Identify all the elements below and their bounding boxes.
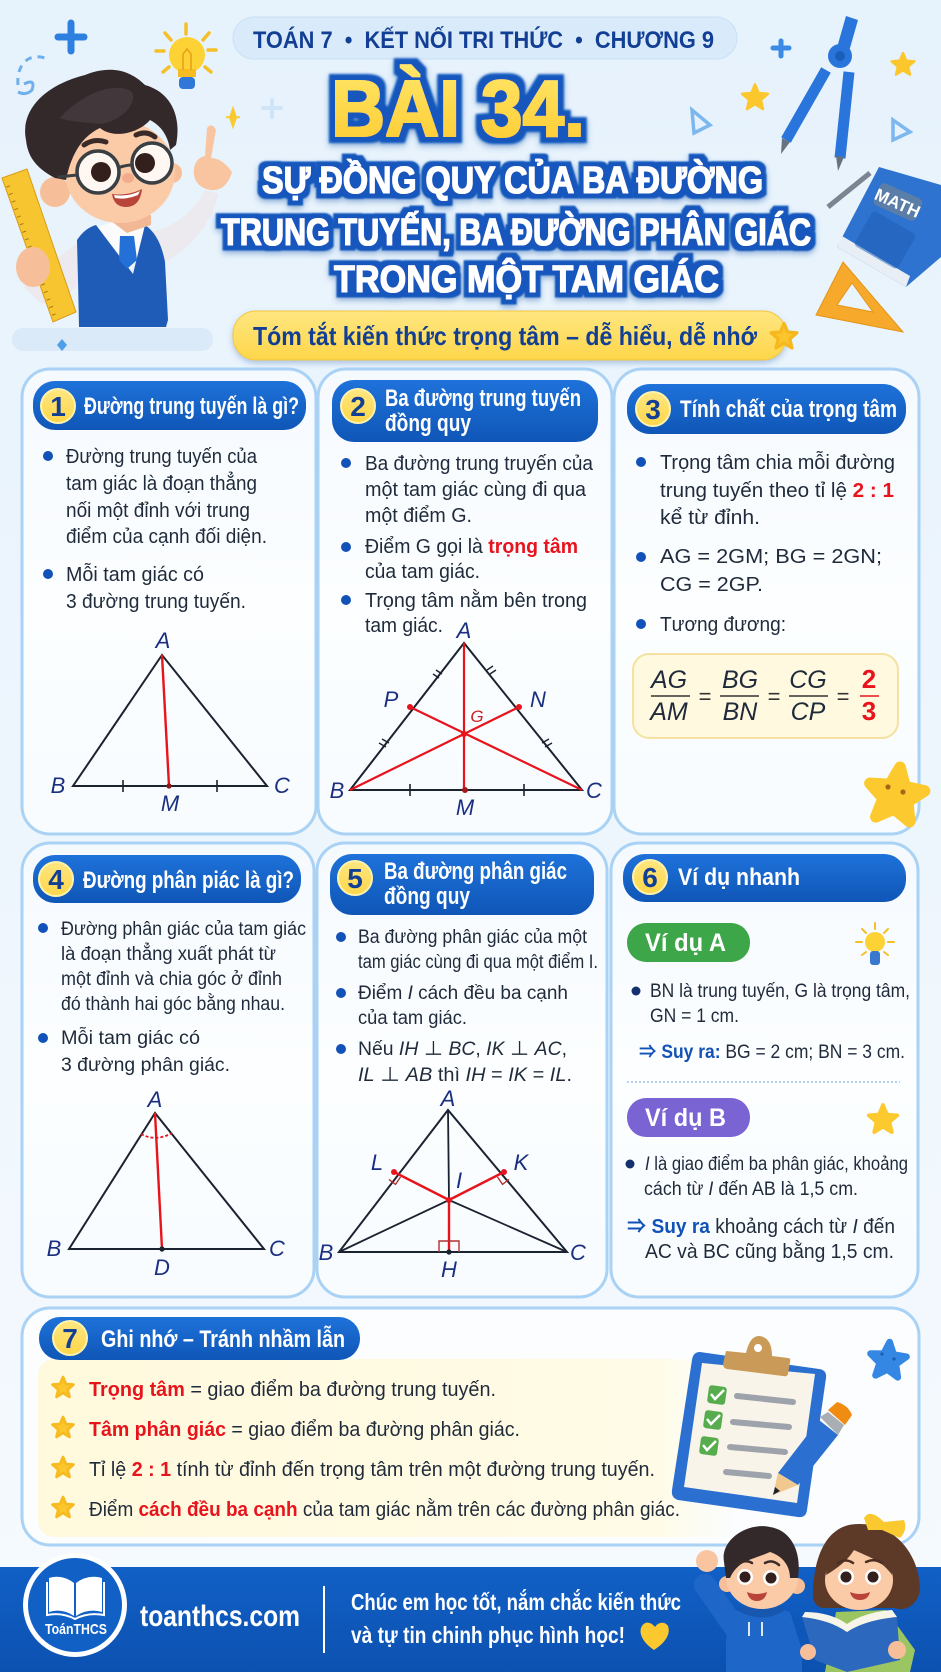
diagram: triangle with bisector AD [47, 1087, 285, 1280]
diagram: triangle ABC with median AM: C [274, 773, 290, 798]
panel 7: remember [22, 1308, 919, 1545]
text 2: một điểm G. [365, 505, 472, 527]
footer band [0, 1553, 941, 1672]
text 3: Tương đương: [660, 614, 786, 636]
example A: GN = 1 cm. [650, 1006, 739, 1027]
icon: blue star [869, 1340, 908, 1378]
text 4: 3 đường phân giác. [61, 1055, 230, 1076]
text 2: Trọng tâm nằm bên trong [365, 589, 587, 612]
header 7 [39, 1317, 360, 1360]
text 2: Ba đường trung truyến của [365, 453, 594, 475]
diagram: triangle with centroid G: P [384, 687, 399, 712]
icon: clipboard with pencil [672, 1336, 852, 1517]
remember list: Điểm cách đều ba cạnh của tam giác nằm trên các đường phân giác. [89, 1498, 680, 1521]
text 3: kể từ đỉnh. [660, 507, 760, 529]
title: lesson name: TRONG MỘT TAM GIÁC [334, 256, 719, 301]
text 5 [336, 927, 598, 1086]
text 2: Điểm G gọi là trọng tâm [365, 536, 578, 558]
icon: heart [640, 1623, 669, 1650]
diagram: triangle with centroid G: M [456, 795, 475, 820]
header 7: 7 [62, 1323, 78, 1354]
text 5: Ba đường phân giác của một [358, 927, 588, 948]
header 1 [33, 381, 306, 430]
icon: set square [816, 262, 903, 332]
panel 2: three medians concurrent [318, 369, 612, 834]
panel 6: quick examples [611, 843, 918, 1297]
text 5: của tam giác. [358, 1008, 467, 1029]
header 3: 3 [645, 394, 661, 425]
example A [627, 923, 910, 1063]
header 2 [332, 380, 598, 442]
icon: compass [781, 16, 858, 171]
formula box: CP [791, 698, 826, 726]
text 3: Trọng tâm chia mỗi đường [660, 451, 895, 474]
diagram: triangle with centroid G [330, 618, 602, 820]
title: lesson number: BÀI 34. [331, 64, 585, 153]
open book [802, 1617, 900, 1672]
panel 5: three bisectors concurrent [317, 843, 607, 1297]
formula box: AM [648, 698, 688, 726]
header 5: 5 [347, 863, 363, 894]
header 3 [627, 384, 906, 434]
text 1: Đường trung tuyến của [66, 446, 258, 468]
icon: small bulb [856, 923, 894, 965]
diagram: triangle with bisector AD: B [47, 1236, 61, 1261]
formula box: CG [789, 666, 827, 694]
text 1: nối một đỉnh với trung [66, 500, 250, 522]
subtitle pill [233, 311, 797, 360]
example A: ⇒ Suy ra: BG = 2 cm; BN = 3 cm. [639, 1042, 905, 1063]
formula box: 3 [862, 696, 876, 726]
text 1: Mỗi tam giác có [66, 563, 204, 586]
logo: ToánTHCS [45, 1621, 107, 1638]
icon: math book [828, 167, 941, 287]
panel 4: bisector definition [22, 843, 314, 1297]
text 3: CG = 2GP. [660, 574, 763, 596]
formula box: = [768, 684, 780, 709]
header 5: đồng quy [384, 883, 471, 910]
remember list: Tỉ lệ 2 : 1 tính từ đỉnh đến trọng tâm trên một đường trung tuyến. [89, 1459, 655, 1481]
formula box: BN [723, 698, 758, 726]
text 2: của tam giác. [365, 561, 480, 583]
diagram: triangle with incenter I: L [371, 1150, 383, 1175]
header 5: Ba đường phân giác [384, 858, 567, 885]
diagram: triangle with incenter I: C [570, 1240, 586, 1265]
text 3: AG = 2GM; BG = 2GN; [660, 546, 882, 568]
header 2: đồng quy [385, 410, 472, 437]
text 3: trung tuyến theo tỉ lệ 2 : 1 [660, 480, 894, 502]
decorative icons: top left [18, 23, 281, 127]
remember list: Tâm phân giác = giao điểm ba đường phân giác. [89, 1419, 520, 1441]
diagram: triangle with centroid G: N [530, 687, 546, 712]
example A: Ví dụ A [645, 929, 726, 957]
header 4 [33, 855, 301, 903]
header 2: 2 [350, 391, 366, 422]
panel 1: median definition [22, 369, 316, 834]
diagram: triangle with centroid G: A [455, 618, 471, 643]
diagram: triangle with incenter I [319, 1086, 586, 1282]
diagram: triangle with bisector AD: A [146, 1087, 162, 1112]
header 4: 4 [48, 864, 64, 895]
text 1: 3 đường trung tuyến. [66, 591, 246, 613]
kids: boy and girl [696, 1514, 920, 1672]
mascot: boy with ruler [2, 70, 232, 351]
diagram: triangle ABC with median AM: B [51, 773, 65, 798]
title: lesson name: SỰ ĐỒNG QUY CỦA BA ĐƯỜNG [262, 158, 763, 202]
text 4 [38, 919, 306, 1076]
formula box [633, 654, 898, 738]
diagram: triangle with centroid G: B [330, 778, 344, 803]
text 3 [636, 451, 895, 636]
text 4: Mỗi tam giác có [61, 1027, 200, 1049]
diagram: triangle with centroid G: C [586, 778, 602, 803]
example B: cách từ I đến AB là 1,5 cm. [644, 1179, 858, 1200]
boy [696, 1526, 805, 1672]
diagram: triangle with bisector AD: C [269, 1236, 285, 1261]
header 1: 1 [50, 391, 66, 422]
header 6 [623, 854, 906, 902]
text 2 [341, 453, 594, 637]
formula box: 2 [862, 664, 876, 694]
formula box: AG [649, 666, 687, 694]
remember list: Trọng tâm = giao điểm ba đường trung tuyến. [89, 1379, 496, 1401]
panel 3: centroid properties [614, 369, 927, 834]
text 2: tam giác. [365, 615, 443, 637]
text 5: IL ⊥ AB thì IH = IK = IL. [358, 1065, 572, 1086]
title: lesson name [221, 158, 811, 301]
diagram: triangle ABC with median AM: M [161, 791, 180, 816]
text 4: một đỉnh và chia góc ở đỉnh [61, 969, 282, 990]
header 1: Đường trung tuyến là gì? [84, 393, 299, 420]
title: lesson name: TRUNG TUYẾN, BA ĐƯỜNG PHÂN GIÁC [221, 210, 811, 254]
formula box: BG [722, 666, 758, 694]
example B [626, 1098, 908, 1263]
closing message: và tự tin chinh phục hình học! [351, 1622, 625, 1648]
text 4: là đoạn thẳng xuất phát từ [61, 943, 276, 965]
diagram: triangle with centroid G: G [470, 707, 484, 726]
header 4: Đường phân piác là gì? [83, 867, 294, 894]
diagram: triangle ABC with median AM: A [154, 628, 170, 653]
formula box: = [837, 684, 849, 709]
icon: star mascot [865, 763, 927, 823]
icon: light bulb [156, 24, 216, 89]
girl [800, 1514, 920, 1672]
remember list [53, 1377, 680, 1521]
formula box: = [699, 684, 711, 709]
text 1: tam giác là đoạn thẳng [66, 471, 257, 495]
text 4: đó thành hai góc bằng nhau. [61, 993, 285, 1015]
text 5: Nếu IH ⊥ BC, IK ⊥ AC, [358, 1039, 567, 1060]
subtitle pill: Tóm tắt kiến thức trọng tâm – dễ hiểu, dễ nhớ [253, 321, 757, 351]
example B: I là giao điểm ba phân giác, khoảng [645, 1154, 908, 1175]
header 7: Ghi nhớ – Tránh nhầm lẫn [101, 1325, 345, 1353]
example B: AC và BC cũng bằng 1,5 cm. [645, 1240, 894, 1263]
header 6: 6 [642, 862, 658, 893]
diagram: triangle with incenter I: B [319, 1240, 333, 1265]
text 5: Điểm I cách đều ba cạnh [358, 983, 568, 1004]
diagram: triangle with incenter I: H [441, 1257, 457, 1282]
text 1: điểm của cạnh đối diện. [66, 526, 267, 548]
header 2: Ba đường trung tuyến [385, 385, 581, 412]
header 6: Ví dụ nhanh [678, 864, 800, 891]
example B: ⇒ Suy ra khoảng cách từ I đến [627, 1216, 895, 1238]
text 5: tam giác cùng đi qua một điểm I. [358, 952, 598, 973]
subject pill: TOÁN 7 • KẾT NỐI TRI THỨC • CHƯƠNG 9 [253, 26, 714, 54]
diagram: triangle with incenter I: K [514, 1150, 530, 1175]
text 2: một tam giác cùng đi qua [365, 479, 587, 501]
closing message [351, 1588, 681, 1648]
memo background [38, 1359, 738, 1537]
site name: toanthcs.com [140, 1600, 300, 1633]
header 5 [330, 854, 594, 915]
text 4: Đường phân giác của tam giác [61, 919, 306, 940]
example B: Ví dụ B [645, 1104, 726, 1132]
diagram: triangle with incenter I: A [439, 1086, 455, 1111]
decorative icons: top right [692, 41, 914, 140]
subject pill [233, 17, 737, 59]
diagram: triangle with incenter I: I [456, 1168, 462, 1193]
text 1 [43, 446, 267, 613]
icon: math book: MATH [872, 185, 923, 222]
example A: BN là trung tuyến, G là trọng tâm, [650, 981, 910, 1002]
diagram: triangle ABC with median AM [51, 628, 290, 816]
closing message: Chúc em học tốt, nắm chắc kiến thức [351, 1588, 681, 1615]
diagram: triangle with bisector AD: D [154, 1255, 170, 1280]
logo [23, 1553, 127, 1657]
